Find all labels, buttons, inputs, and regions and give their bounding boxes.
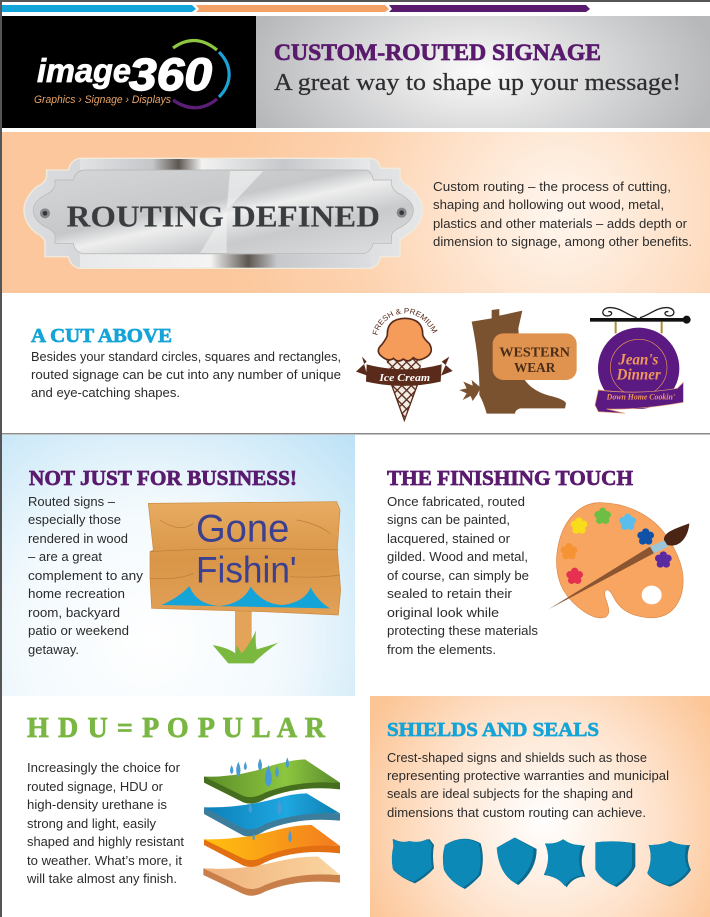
body text: from the elements.	[387, 642, 496, 657]
icon: gone fishin sign: Fishin'	[196, 549, 297, 591]
ribbon tails	[356, 357, 453, 376]
diner text: Jean's	[617, 351, 658, 368]
body text: Once fabricated, routed	[387, 494, 525, 509]
heading: NOT JUST FOR BUSINESS!	[29, 466, 297, 490]
body text: to weather. What’s more, it	[27, 853, 182, 868]
icon: diner hanging sign: Down Home Cookin'	[606, 393, 676, 402]
icon: diner hanging sign: Dinner	[616, 366, 662, 383]
shield 3	[497, 838, 537, 885]
heading: H D U = P O P U L A R	[27, 713, 326, 744]
brush	[548, 523, 689, 609]
body text: original look while	[387, 605, 499, 620]
shield 6	[647, 841, 691, 887]
logo number: 360	[129, 49, 212, 100]
scoop	[378, 318, 431, 361]
logo arcs	[173, 40, 229, 108]
body text	[28, 494, 144, 657]
water	[162, 586, 330, 608]
header title panel	[256, 16, 710, 128]
heading: A CUT ABOVE	[31, 325, 172, 347]
shield 1	[392, 839, 434, 883]
body text	[387, 494, 539, 657]
subtitle: A great way to shape up your message!	[274, 70, 681, 96]
routing description: shaping and hollowing out wood, metal,	[433, 197, 664, 212]
tan layer	[203, 857, 340, 896]
panel: the finishing touch	[387, 466, 689, 657]
icon: material layers	[203, 757, 340, 896]
body text	[31, 349, 341, 400]
body text: especially those	[28, 512, 121, 527]
panel: a cut above	[2, 306, 710, 434]
panel: shields and seals	[370, 696, 710, 917]
body text: representing protective warranties and municipal	[387, 768, 669, 783]
header logo panel	[2, 16, 256, 128]
top chevron stripe	[2, 5, 590, 12]
body text: strong and light, easily	[27, 816, 156, 831]
body text: getaway.	[28, 642, 79, 657]
body text: Besides your standard circles, squares and rectangles,	[31, 349, 341, 364]
routing description: plastics and other materials – adds depth or	[433, 216, 688, 231]
ribbon	[595, 382, 683, 413]
body text: shaped and highly resistant	[27, 834, 184, 849]
body text: Increasingly the choice for	[27, 760, 181, 775]
shield 5	[595, 841, 635, 887]
body text: home recreation	[28, 586, 125, 601]
blue layer	[204, 793, 340, 836]
body text: gilded. Wood and metal,	[387, 549, 528, 564]
icon: western boot sign: WEAR	[514, 361, 556, 376]
icon: western boot sign	[459, 309, 577, 414]
left screw	[40, 208, 50, 218]
body text: Routed signs –	[28, 494, 116, 509]
title: CUSTOM-ROUTED SIGNAGE	[274, 40, 601, 65]
icon: diner hanging sign	[590, 308, 691, 413]
body text: seals are ideal subjects for the shaping and	[387, 786, 633, 801]
board	[148, 502, 341, 615]
heading: THE FINISHING TOUCH	[387, 466, 633, 490]
body text: will take almost any finish.	[26, 871, 177, 886]
green layer	[204, 759, 340, 804]
body text: of course, can simply be	[387, 568, 529, 583]
routing description: Custom routing – the process of cutting,	[433, 179, 671, 194]
curved text	[377, 313, 433, 336]
ribbon text: Ice Cream	[378, 372, 430, 384]
logo wordmark: image	[37, 52, 131, 89]
body text: – are a great	[28, 549, 102, 564]
orange layer	[204, 825, 340, 867]
routing description	[433, 179, 692, 249]
metal plate sign	[24, 158, 423, 268]
body text: Crest-shaped signs and shields such as those	[387, 750, 647, 765]
heading: SHIELDS AND SEALS	[387, 719, 599, 741]
logo tagline: Graphics › Signage › Displays	[34, 94, 171, 106]
body text: routed signage can be cut into any number of unique	[31, 367, 341, 382]
body text: sealed to retain their	[387, 586, 513, 601]
shield 2	[443, 839, 483, 889]
icon: paint palette	[548, 503, 689, 618]
icon: ice cream sign	[356, 308, 453, 422]
body text	[26, 760, 184, 886]
shield icons	[392, 838, 691, 889]
body text: dimensions that custom routing can achieve.	[387, 805, 646, 820]
panel: hdu popular	[26, 713, 340, 896]
panel: routing defined	[2, 132, 710, 293]
water drops	[230, 757, 292, 843]
body text	[387, 750, 669, 820]
ribbon band	[366, 364, 442, 386]
routing description: dimension to signage, among other benefits.	[433, 234, 692, 249]
paint dabs	[561, 508, 672, 584]
sign text: Gone	[196, 507, 289, 551]
post	[235, 610, 252, 657]
body text: lacquered, stained or	[387, 531, 511, 546]
panel: not just for business	[2, 435, 355, 696]
body text: protecting these materials	[387, 623, 539, 638]
body text: and eye-catching shapes.	[31, 385, 180, 400]
body text: routed signage, HDU or	[27, 779, 164, 794]
body text: patio or weekend	[28, 623, 129, 638]
shield 4	[544, 839, 585, 887]
sign text: WESTERN	[499, 346, 570, 361]
body text: complement to any	[28, 568, 144, 583]
icon: ice cream sign: FRESH & PREMIUM	[372, 308, 438, 335]
icon: gone fishin sign	[148, 502, 341, 663]
body text: signs can be painted,	[387, 512, 510, 527]
iron bar	[590, 308, 691, 324]
right screw	[397, 208, 407, 218]
grass	[213, 631, 278, 663]
body text: rendered in wood	[28, 531, 128, 546]
body text: high-density urethane is	[27, 797, 168, 812]
body text: room, backyard	[28, 605, 120, 620]
sign text: ROUTING DEFINED	[67, 200, 380, 234]
